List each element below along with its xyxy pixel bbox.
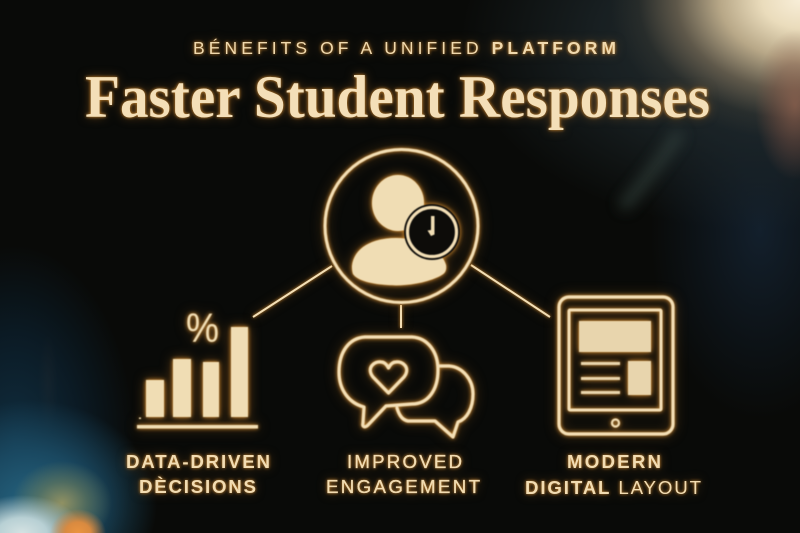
- title: Faster Student Responses: [85, 64, 710, 130]
- label: improved engagement: ENGAGEMENT: [326, 476, 480, 497]
- label: data-driven decisions: DATA-DRIVEN: [126, 451, 270, 472]
- label: improved engagement: IMPROVED: [347, 451, 462, 472]
- label: modern digital layout: MODERN: [567, 451, 661, 472]
- percent sign: %: [186, 305, 219, 351]
- label: data-driven decisions: [126, 451, 270, 497]
- label: modern digital layout: DIGITAL LAYOUT: [525, 477, 701, 498]
- label: data-driven decisions: DÈCISIONS: [139, 476, 256, 497]
- icon: chat bubbles with heart: [339, 337, 473, 437]
- icon: tablet layout: [559, 297, 673, 434]
- icon: bar chart: [137, 305, 258, 428]
- connector lines: [253, 265, 550, 328]
- label: improved engagement: [326, 451, 480, 497]
- label: modern digital layout: [525, 451, 701, 498]
- eyebrow heading: BÉNEFITS OF A UNIFIED PLATFORM: [193, 38, 616, 58]
- lens streak: [622, 132, 680, 208]
- heart: [370, 362, 407, 393]
- icon: student with clock: [325, 150, 478, 302]
